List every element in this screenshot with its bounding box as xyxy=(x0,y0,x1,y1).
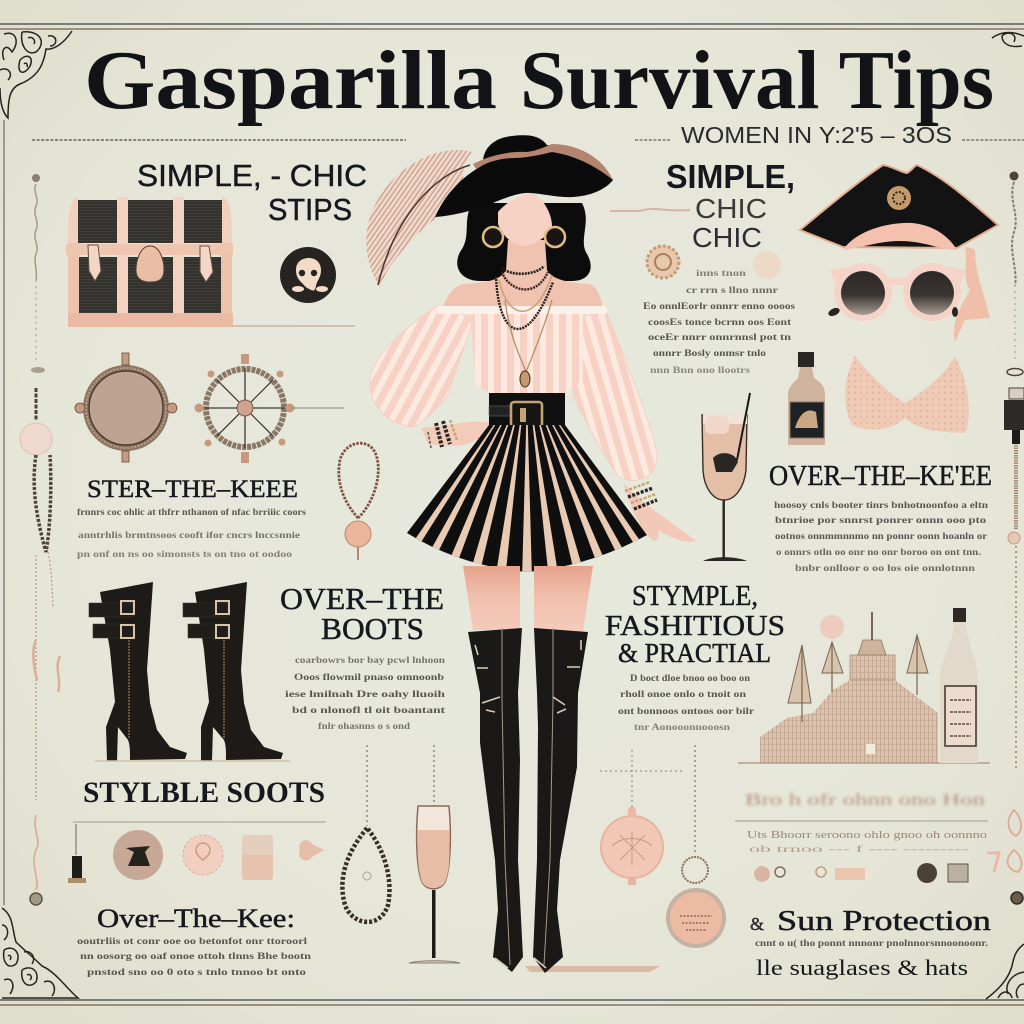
heading: stylble soots: STYLBLE SOOTS xyxy=(83,776,325,809)
heading: sun protection: Sun Protection xyxy=(777,905,992,937)
text block: upper right: nnn Bnn ono llootrs xyxy=(650,365,751,375)
belt xyxy=(489,393,565,428)
heading: simple chic stips xyxy=(137,158,367,227)
text block: left middle: frnnrs coc ohlic at thfrr nthanon of nfac brriiic coors xyxy=(77,507,307,517)
text block: practical: rholl onoe onlo o tnoit on xyxy=(620,689,746,699)
text block: left middle: anntrhlis brmtnsoos cooft ifor cncrs lnccsnnie xyxy=(78,530,300,540)
text block: practical xyxy=(618,673,754,732)
heading: simple chic chic: SIMPLE, xyxy=(666,158,795,195)
neck and shoulders xyxy=(443,240,603,314)
feather xyxy=(366,150,472,288)
heading: stymple fashitious practial: FASHITIOUS xyxy=(605,610,785,642)
heading: over-the boots xyxy=(280,581,444,646)
text block: blurred banner xyxy=(735,790,988,854)
earrings xyxy=(483,227,565,247)
right chain decoration xyxy=(1004,172,1024,904)
heading: simple chic stips: SIMPLE, - CHIC xyxy=(137,158,367,193)
heading: stymple fashitious practial xyxy=(605,580,785,668)
icon: castle and bottle xyxy=(738,608,990,763)
icon: pair of boots xyxy=(89,582,290,761)
text block: blurred banner: Uts Bhoorr seroono ohlo gnoo oh oonnno xyxy=(747,830,987,841)
text block: upper right: Eo onnlEorlr onnrr enno oooos xyxy=(643,301,796,311)
skin wrist and hand xyxy=(421,421,506,446)
text block: upper right: oceEr nnrr onnrnnsl pot tn xyxy=(648,332,791,342)
text block: right middle xyxy=(774,500,988,573)
icon: pirate hat with scarf xyxy=(800,165,998,342)
heading: stymple fashitious practial: & PRACTIAL xyxy=(618,638,771,668)
text block: practical: ont bonnoos ontoos oor bilr xyxy=(618,706,754,716)
heading: stymple fashitious practial: STYMPLE, xyxy=(632,580,758,612)
icon: lace bra xyxy=(845,356,969,433)
text block: practical: D boct dloe bnoo oo boo on xyxy=(630,673,750,683)
legs xyxy=(463,566,593,632)
title: Survival Tips xyxy=(520,34,994,127)
text block: left middle: pn onf on ns oo simonsts ts on tno ot oodoo xyxy=(77,549,293,559)
skirt xyxy=(407,425,647,572)
text block: boots: fnlr ohasnns o s ond xyxy=(318,721,410,731)
left chain decoration xyxy=(20,174,60,905)
text block: boots: bd o nlonofl tl oit boantant xyxy=(292,705,445,715)
text block: bottom left: ooutrliis ot conr ooe oo betonfot onr ttoroorl xyxy=(77,936,308,946)
icon: ship wheel xyxy=(194,354,344,463)
icon: skull badge xyxy=(280,247,336,303)
text block: right middle: hoosoy cnls booter tinrs bnhotnoonfoo a eltn xyxy=(774,500,988,510)
icon: bottle xyxy=(788,352,825,445)
icon: porthole xyxy=(75,353,177,462)
text block: boots: Ooos flowmil pnaso omnoonb xyxy=(294,672,444,682)
text block: boots: iese lmilnah Dre oahy lluoih xyxy=(285,689,445,699)
title xyxy=(84,34,994,127)
central figure xyxy=(366,135,696,973)
text block: upper right: cr rrn s llno nnnr xyxy=(686,285,778,295)
left over-the-knee boot xyxy=(468,628,523,972)
icon: round pendant xyxy=(600,750,683,885)
text block: right middle: bnbr onlloor o oo los oie onnlotnnn xyxy=(795,563,975,573)
heading: over-the-kee: Over–The–Kee: xyxy=(97,904,295,933)
heading: sun protection: & xyxy=(750,914,764,934)
icon: pocket medallion xyxy=(666,745,726,948)
face xyxy=(498,193,552,246)
text block: upper right: inns tnon xyxy=(696,268,746,278)
text block: right middle: o onnrs otln oo onr no onr boroo on ont tnn. xyxy=(776,547,981,557)
right over-the-knee boot xyxy=(533,628,588,973)
heading: over-the boots: BOOTS xyxy=(321,611,424,646)
text block: right middle: btnrioe por snnrst ponrer onnn ooo pto xyxy=(775,515,987,525)
text block: upper right xyxy=(643,268,796,375)
icon: treasure chest xyxy=(66,197,355,327)
icon: sunglasses xyxy=(827,263,966,321)
text block: right middle: ootnos onnmmnnmo nn ponnr oonn hoanln or xyxy=(775,531,987,541)
text block: bottom left xyxy=(77,936,311,977)
right sleeve xyxy=(573,313,657,481)
heading: simple chic chic xyxy=(666,158,795,253)
heading: simple chic chic: CHIC xyxy=(692,222,762,253)
text block: blurred banner: Bro h ofr ohnn ono Hon xyxy=(745,790,986,809)
text block: blurred banner: ob trnoo --- f ---- --------- xyxy=(749,844,969,854)
text block: upper right: coosEs tonce bcrnn oos Eont xyxy=(648,317,791,327)
text block: boots xyxy=(285,655,445,731)
text block: sunglasses and hats: lle suaglases & hats xyxy=(756,955,968,980)
icon row: blurred small icons xyxy=(754,853,999,883)
icon: rose medallions xyxy=(610,209,781,279)
bodice xyxy=(470,314,583,393)
text block: sun protection line: cnnt o u( tho ponnt nnnonr pnolnnorsnnoonoonr. xyxy=(755,938,988,948)
text block: upper right: onnrr Bosly onmsr tnlo xyxy=(653,348,767,358)
text block: bottom left: nn oosorg oo oaf onoe ottoh tlnns Bhe bootn xyxy=(80,951,311,961)
text block: bottom left: pnstod sno oo 0 oto s tnlo tnnoo bt onto xyxy=(87,967,307,977)
subtitle: WOMEN IN Y:2'5 – 3OS xyxy=(681,122,952,148)
icon: champagne flute xyxy=(409,745,460,963)
heading: simple chic chic: CHIC xyxy=(695,193,767,224)
heading: over-the boots: OVER–THE xyxy=(280,581,444,616)
heading: over-the-keee right: OVER–THE–KE'EE xyxy=(769,461,992,492)
text block: boots: coarbowrs bor bay pcwl lnhoon xyxy=(295,655,445,665)
heading: simple chic stips: STIPS xyxy=(268,192,352,227)
text block: practical: tnr Aonooonnooosn xyxy=(634,722,730,732)
icon: pendant necklace xyxy=(339,443,378,560)
left bracelet xyxy=(428,420,457,448)
heading: ster-the-keee: STER–THE–KEEE xyxy=(87,476,298,503)
right bracelet xyxy=(625,482,657,509)
text block: left middle xyxy=(77,507,307,559)
icon row: accessories xyxy=(68,822,326,883)
hat xyxy=(435,135,613,217)
title: Gasparilla xyxy=(84,34,497,127)
left sleeve xyxy=(370,306,474,427)
icon: cocktail glass xyxy=(702,393,750,561)
right wrist and hand xyxy=(623,482,696,542)
necklaces xyxy=(496,266,553,387)
hair xyxy=(457,203,591,281)
floor shadow xyxy=(525,966,660,972)
icon: beaded necklace xyxy=(342,745,389,922)
